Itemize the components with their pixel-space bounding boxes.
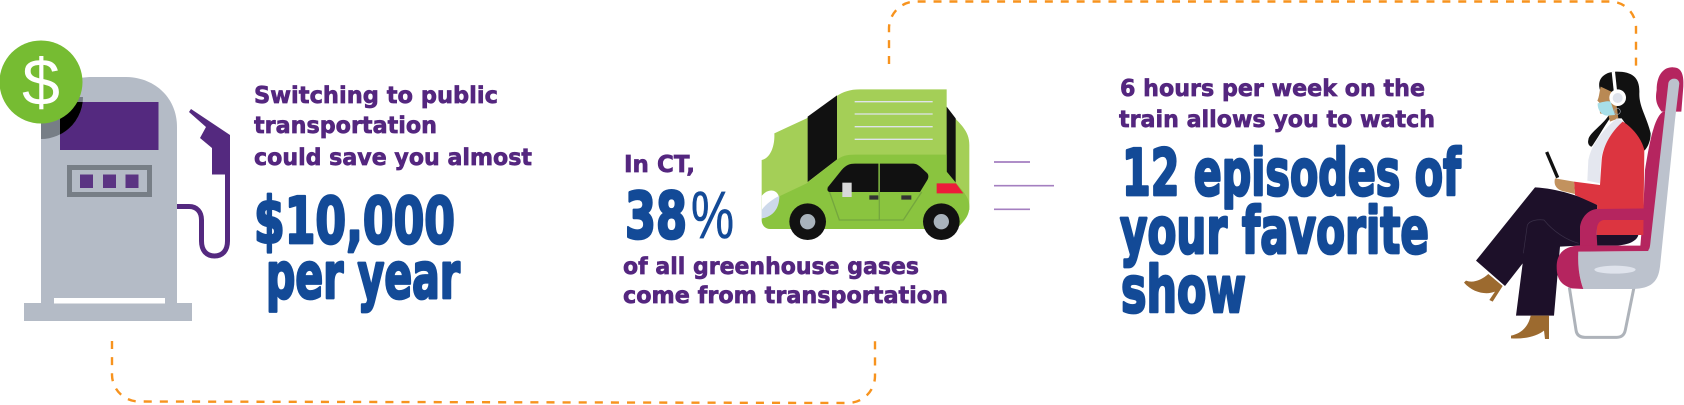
dollar coin: $	[22, 45, 60, 119]
speed lines	[994, 162, 1054, 209]
back boot	[1464, 274, 1503, 302]
coin shadow on body	[41, 97, 83, 139]
door outlines	[828, 164, 922, 220]
hose	[177, 172, 228, 256]
seat shell	[1578, 79, 1679, 289]
text: episodes headline: 12 episodes of	[1122, 137, 1462, 211]
pump screen	[60, 102, 158, 150]
red cardigan	[1574, 122, 1644, 235]
text: episodes headline	[1120, 137, 1462, 328]
phone	[1547, 152, 1558, 178]
text: greenhouse gases: come from transportation	[623, 281, 948, 309]
rear wheel	[923, 203, 960, 240]
text: savings lead-in: could save you almost	[254, 143, 532, 171]
black panel right	[947, 107, 956, 185]
coin shadow on screen	[60, 102, 83, 134]
text: greenhouse gases: of all greenhouse gases	[623, 252, 919, 280]
headphones	[1609, 72, 1626, 106]
text: In CT: In CT,	[624, 150, 695, 178]
text: savings figure: per year	[266, 240, 460, 314]
seat legs	[1569, 287, 1634, 337]
face mask	[1598, 101, 1615, 116]
seat back magenta	[1640, 112, 1673, 250]
headrest	[1656, 67, 1683, 112]
text: savings figure: $10,000	[254, 185, 455, 259]
mirror	[842, 183, 852, 197]
keypad	[70, 168, 150, 194]
face and neck	[1597, 87, 1618, 122]
icon: gas pump	[0, 40, 230, 321]
text: savings lead-in: Switching to public	[254, 81, 498, 109]
hand	[1555, 178, 1575, 194]
seat highlight	[1594, 266, 1636, 274]
text: train lead-in	[1119, 74, 1435, 133]
windows	[827, 164, 928, 192]
trousers	[1476, 187, 1638, 316]
nozzle	[189, 109, 230, 174]
armrest	[1580, 208, 1653, 248]
headlight	[762, 190, 779, 218]
pump base	[24, 303, 192, 321]
taillight	[937, 183, 963, 193]
pump body	[41, 77, 177, 303]
car body	[762, 155, 969, 229]
dashed connector: top	[889, 1, 1636, 66]
text: train lead-in: 6 hours per week on the	[1120, 74, 1425, 102]
earring	[1614, 108, 1620, 114]
text: episodes headline: show	[1121, 254, 1246, 328]
illustration: woman on train seat	[1464, 67, 1683, 339]
exhaust cloud backdrop	[762, 89, 969, 210]
text: savings figure	[254, 185, 460, 314]
text: savings lead-in	[254, 81, 532, 171]
long hair	[1588, 72, 1651, 151]
text: train lead-in: train allows you to watch	[1119, 105, 1435, 133]
text: 38 percent: %	[691, 178, 734, 253]
white shirt	[1587, 118, 1624, 183]
seat cushion	[1557, 246, 1648, 289]
dashed connector: bottom	[112, 341, 875, 403]
door handles	[869, 195, 911, 200]
trouser creases	[1523, 220, 1579, 253]
dollar coin	[0, 40, 82, 124]
text: episodes headline: your favorite	[1120, 195, 1429, 269]
text: 38 percent: 38	[625, 180, 687, 254]
pump slot	[54, 298, 165, 304]
front wheel	[789, 203, 826, 240]
cloud lines	[855, 102, 933, 139]
black panel left	[808, 95, 837, 182]
text: savings lead-in: transportation	[254, 111, 437, 139]
icon: green car	[762, 89, 1054, 240]
text: greenhouse gases	[623, 252, 948, 309]
front boot	[1511, 316, 1549, 339]
